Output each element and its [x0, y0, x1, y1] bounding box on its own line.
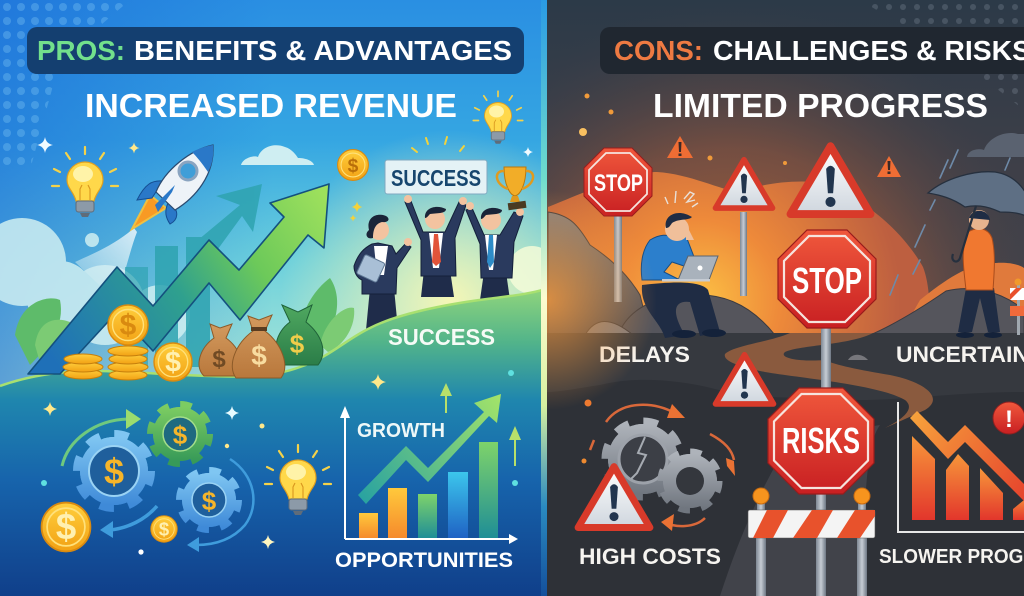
- cons header bar: CHALLENGES & RISKS: [713, 35, 1024, 66]
- sign: warning middle: [716, 355, 773, 404]
- sign: success: [385, 160, 487, 194]
- stress marks: [665, 191, 698, 207]
- pole: stop sign: [614, 212, 622, 302]
- head: [665, 213, 694, 241]
- label: delays: DELAYS: [599, 342, 690, 367]
- winding road: [725, 333, 933, 428]
- label: growth: GROWTH: [357, 420, 445, 442]
- label: opportunities: OPPORTUNITIES: [335, 549, 513, 572]
- legs: [958, 288, 1000, 332]
- person sitting with laptop: [641, 191, 726, 338]
- heading: limited progress: LIMITED PROGRESS: [653, 87, 988, 124]
- pros header bar: PROS:: [37, 35, 125, 66]
- coin large: $: [56, 506, 76, 547]
- sign: warning small: [715, 160, 773, 208]
- cons header bar: CONS:: [614, 35, 703, 66]
- sign: risks: [768, 388, 874, 494]
- pros header bar: BENEFITS & ADVANTAGES: [134, 35, 512, 66]
- label: success: SUCCESS: [388, 324, 495, 350]
- gear: large blue: $: [104, 451, 124, 492]
- orange warning signs small: [667, 136, 901, 177]
- cons background: [546, 0, 1024, 340]
- sign: risks: RISKS: [782, 420, 860, 461]
- arrow: green arc: [62, 409, 141, 466]
- divider glow: [546, 190, 656, 410]
- distant hills: [546, 333, 1024, 400]
- orange cloud right: [900, 263, 1024, 335]
- coin stacks: $: [120, 309, 137, 342]
- boots: [672, 329, 726, 338]
- barrier lamps: [753, 488, 870, 504]
- money bags: [199, 305, 323, 378]
- declining chart: [879, 402, 1024, 568]
- orange top: [963, 229, 994, 290]
- gear: large blue: [80, 437, 148, 505]
- small stone: [848, 355, 868, 360]
- pros header bar: [27, 27, 524, 74]
- rocks: [548, 212, 1024, 335]
- back teal arrow and bars: [125, 184, 262, 367]
- ground: [546, 333, 1024, 596]
- person: man centre: [404, 195, 467, 297]
- gear: small blue: [182, 473, 236, 527]
- coin stacks: [63, 305, 192, 381]
- icon: lightbulb lower: [265, 445, 331, 515]
- leaves: [15, 278, 354, 370]
- people celebrating: [350, 137, 533, 330]
- orange arcs: [590, 405, 734, 526]
- legs: [642, 283, 720, 338]
- sign: success: SUCCESS: [391, 165, 481, 191]
- chart arrow: [358, 394, 501, 504]
- centre money bag: $: [251, 340, 267, 371]
- person: woman with folder: [354, 215, 412, 330]
- chart axes: [340, 406, 518, 544]
- icon: lightbulb top right: [473, 91, 523, 144]
- coin small: $: [159, 519, 170, 540]
- sweater: [641, 235, 696, 280]
- cloud with rain: [890, 133, 1024, 295]
- panel: pros: [0, 0, 556, 596]
- sign: stop centre: [778, 230, 876, 328]
- green money bag: $: [290, 329, 305, 359]
- small up arrows: [440, 383, 521, 466]
- barrier board: [748, 510, 875, 538]
- coin stacks: $: [165, 347, 181, 378]
- sign: stop centre: STOP: [792, 260, 862, 301]
- gear: small blue: $: [202, 486, 217, 516]
- pole: lower centre: [816, 490, 826, 596]
- trophy: [497, 167, 533, 210]
- person: man with trophy: [466, 202, 524, 300]
- head: [969, 210, 990, 230]
- coin above arrow: [338, 150, 368, 180]
- bottom section with hill: [0, 289, 546, 596]
- lower road: [720, 425, 880, 596]
- sparkles and dots: [41, 370, 518, 555]
- gear: green: $: [173, 420, 188, 450]
- alert badge: [993, 402, 1024, 434]
- sign: stop left: [584, 148, 652, 216]
- left money bag: $: [212, 346, 226, 373]
- coin above arrow: $: [348, 156, 359, 177]
- ember dots: [579, 94, 787, 464]
- chart arrow: [910, 411, 1024, 507]
- pros sky background: [0, 0, 546, 400]
- laptop: [662, 256, 718, 282]
- alert badge: !: [1005, 406, 1013, 433]
- broken gears: [590, 404, 735, 531]
- rocket: [132, 145, 213, 229]
- orange sun mounds: [548, 172, 930, 335]
- small cloud: [241, 145, 314, 165]
- sign: warning large: [790, 146, 871, 214]
- gear: small: [663, 454, 717, 508]
- sparkles: [37, 137, 533, 157]
- chart axes: [898, 402, 1024, 532]
- arrow: blue arc left: [100, 506, 157, 538]
- cons header bar: [600, 27, 1024, 74]
- icon: lightbulb left: [52, 147, 118, 217]
- barrier: [748, 488, 875, 596]
- chart bars: [912, 436, 1024, 520]
- label: high costs: HIGH COSTS: [579, 544, 721, 569]
- centre divider: [541, 0, 547, 596]
- pole: centre: [821, 326, 831, 392]
- heading: increased revenue: INCREASED REVENUE: [85, 87, 457, 124]
- barrier stripes: [753, 510, 875, 538]
- coin small: [151, 516, 177, 542]
- small barrier right: [1010, 278, 1024, 335]
- pole: warning sign: [740, 212, 747, 296]
- gears with dollars: [42, 407, 253, 552]
- arrow: blue arc right: [187, 459, 253, 552]
- panel: cons: [546, 0, 1024, 596]
- barrier poles: [756, 502, 867, 596]
- clouds: [0, 218, 556, 345]
- growth chart: [335, 383, 521, 572]
- person with umbrella: [928, 172, 1024, 338]
- growth zigzag arrow: [28, 184, 329, 374]
- sign: warning lower left: [578, 467, 650, 528]
- gear: large broken: [608, 424, 678, 494]
- chart bars: [359, 442, 498, 538]
- gear: green: [153, 407, 207, 461]
- umbrella handle: [952, 206, 976, 261]
- sign: stop left: STOP: [594, 170, 643, 197]
- coin large: [42, 503, 90, 551]
- umbrella canopy: [928, 172, 1024, 220]
